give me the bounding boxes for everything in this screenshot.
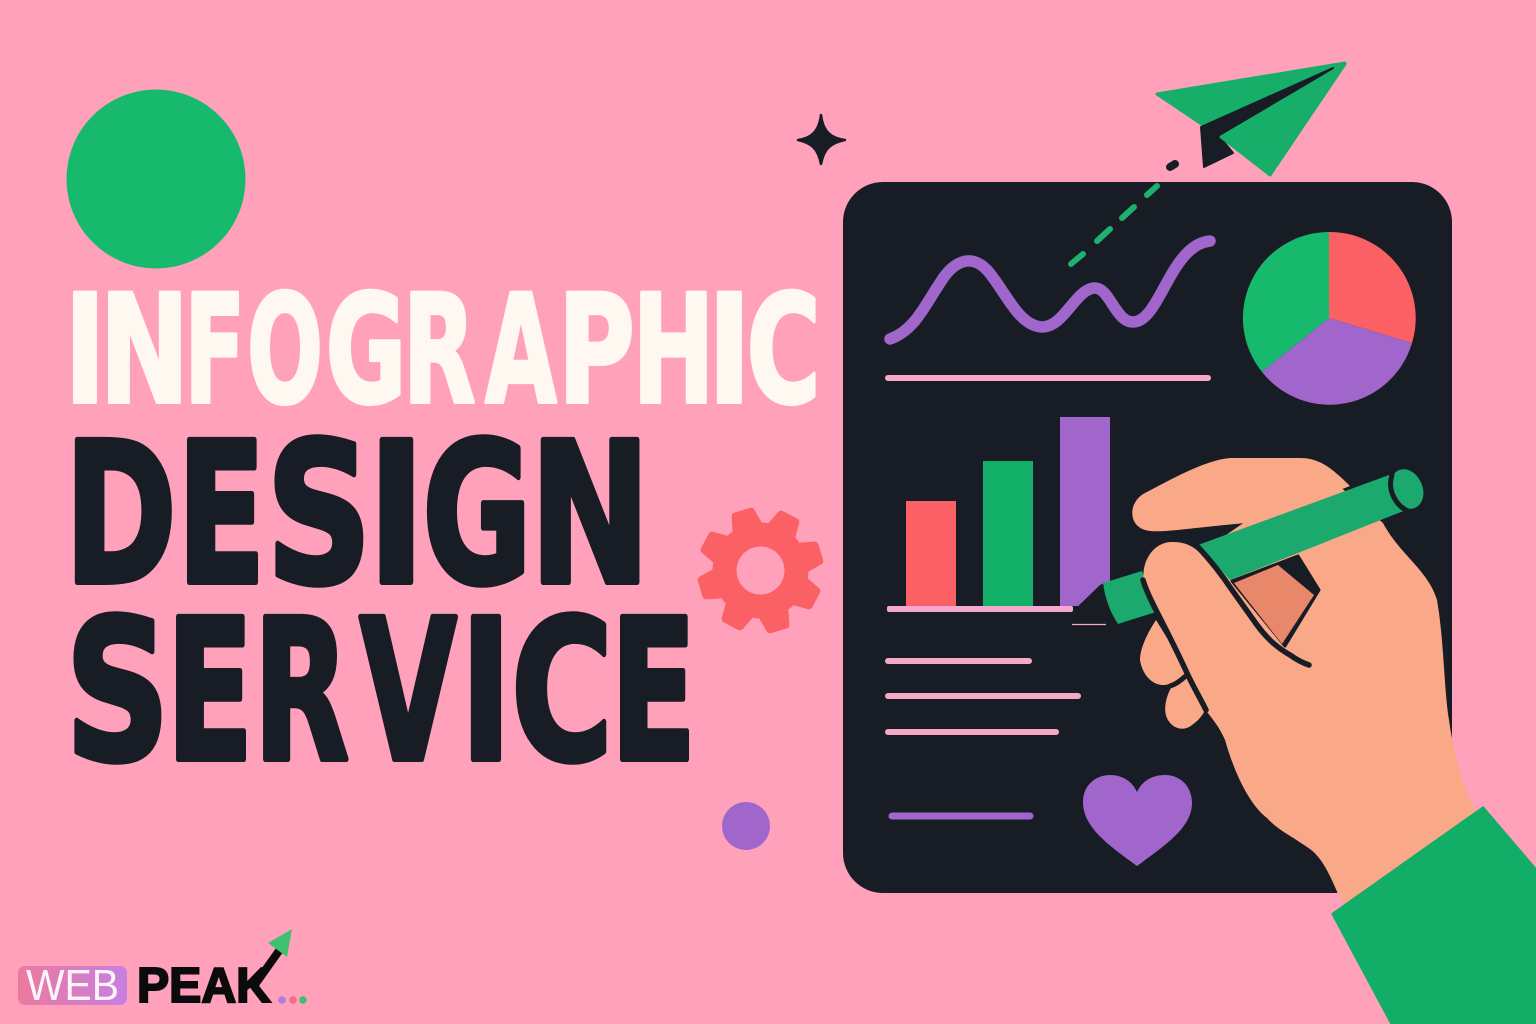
sleeve cuff xyxy=(1333,808,1536,1024)
third finger xyxy=(1140,620,1188,685)
pie chart xyxy=(1243,232,1416,405)
title line: INFOGRAPHIC: P xyxy=(558,264,635,438)
pie slice red xyxy=(1329,232,1416,343)
title line: INFOGRAPHIC: C xyxy=(746,264,821,438)
text line three xyxy=(888,729,1056,735)
purple dot xyxy=(722,802,770,850)
text line two xyxy=(888,693,1078,699)
title line: DESIGN: S xyxy=(266,401,372,628)
divider line under chart xyxy=(888,375,1208,381)
pen lower section xyxy=(1103,571,1156,624)
pie slice green xyxy=(1243,232,1329,372)
bar chart baseline xyxy=(887,606,1073,612)
title line: DESIGN: N xyxy=(530,401,650,628)
title line: INFOGRAPHIC: H xyxy=(632,264,714,438)
logo text PEAK: PEAK xyxy=(137,959,271,1013)
title line: SERVICE: I xyxy=(460,578,512,805)
title xyxy=(64,264,821,805)
fourth finger xyxy=(1165,675,1205,729)
nib reflection line xyxy=(1072,624,1106,626)
green circle xyxy=(66,90,246,268)
title line: INFOGRAPHIC: I xyxy=(708,264,751,438)
title line: SERVICE: E xyxy=(166,578,253,805)
logo arrow shaft xyxy=(254,948,281,986)
logo arrow head xyxy=(268,929,292,957)
title line: SERVICE: S xyxy=(65,578,170,805)
flight path dot xyxy=(1170,164,1175,167)
logo dot green xyxy=(299,996,307,1004)
title line: SERVICE: E xyxy=(610,578,696,805)
title line: DESIGN: I xyxy=(368,401,425,628)
plane right wing xyxy=(1221,64,1345,175)
icon: gear xyxy=(687,497,834,644)
icon: sparkle star xyxy=(798,115,845,164)
dashed flight path xyxy=(1071,164,1175,264)
icon: paper plane xyxy=(1157,63,1345,175)
logo dot red xyxy=(289,996,297,1004)
bar red xyxy=(906,501,956,606)
title line: INFOGRAPHIC: A xyxy=(485,264,557,438)
logo dot purple xyxy=(278,996,286,1004)
logo badge xyxy=(18,966,127,1005)
title line: INFOGRAPHIC: I xyxy=(64,264,106,438)
title line: DESIGN: D xyxy=(64,401,177,628)
index finger xyxy=(1132,458,1350,531)
palm and thumb xyxy=(1143,470,1490,925)
title line: SERVICE: C xyxy=(511,578,613,805)
illustration: hand holding pen xyxy=(1072,458,1536,1024)
shaded palm patch xyxy=(1234,565,1314,644)
pen barrel xyxy=(1198,475,1406,580)
pie slice purple xyxy=(1262,318,1412,405)
pen cap xyxy=(1385,464,1429,514)
title line: INFOGRAPHIC: F xyxy=(184,264,245,438)
thumb outline xyxy=(1143,580,1206,710)
logo text WEB: WEB xyxy=(26,961,119,1010)
finger crease xyxy=(1170,675,1187,686)
icon: heart xyxy=(1083,775,1192,866)
title line: DESIGN: G xyxy=(422,401,532,628)
title line: SERVICE: V xyxy=(360,578,457,805)
title line: INFOGRAPHIC: N xyxy=(100,264,189,438)
bar purple xyxy=(1060,417,1110,606)
purple text line xyxy=(892,812,1030,820)
pen cap crease xyxy=(1391,475,1408,511)
plane dark fold xyxy=(1201,68,1333,167)
text placeholder lines xyxy=(888,661,1078,732)
line chart: purple wave xyxy=(890,241,1210,339)
bar green xyxy=(983,461,1033,606)
title line: INFOGRAPHIC: R xyxy=(403,264,476,438)
logo: WebPeak xyxy=(18,929,307,1013)
panel: dark dashboard card xyxy=(843,182,1452,893)
title line: DESIGN: E xyxy=(177,401,266,628)
title line: SERVICE: R xyxy=(254,578,349,805)
bar chart xyxy=(887,417,1110,612)
title line: INFOGRAPHIC: G xyxy=(326,264,406,438)
thumb inner outline xyxy=(1198,547,1309,665)
logo dots xyxy=(278,996,307,1004)
plane left wing xyxy=(1157,63,1345,125)
text line one xyxy=(888,658,1029,664)
pen nib xyxy=(1072,583,1118,625)
gap between fingers xyxy=(1232,556,1319,646)
title line: INFOGRAPHIC: O xyxy=(247,264,323,438)
flight path dashes xyxy=(1071,186,1157,264)
